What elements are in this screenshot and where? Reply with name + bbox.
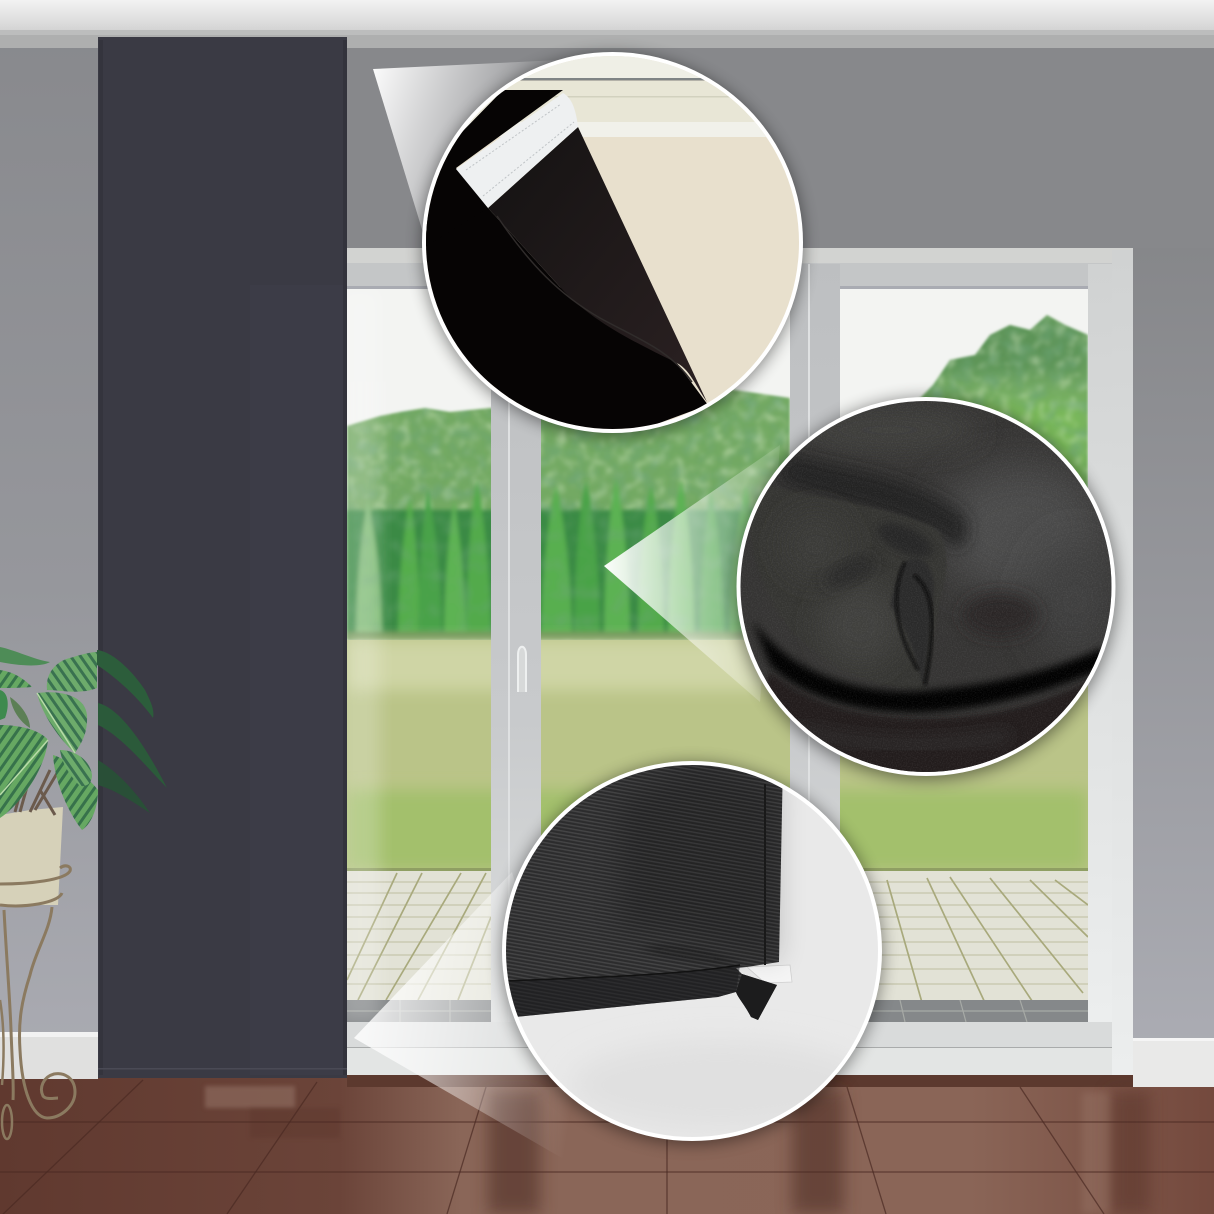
plant stand [0, 866, 75, 1139]
side seam [764, 784, 766, 965]
lawn [347, 640, 1088, 872]
window frame [347, 248, 1133, 1075]
plant pot [0, 807, 63, 905]
window handle [518, 647, 526, 692]
distant trees [347, 315, 1088, 645]
garden view through the glass [340, 289, 1088, 1022]
callout wedge: fabric detail [604, 445, 780, 702]
black fabric front [415, 168, 708, 445]
curtain panel [97, 37, 347, 1078]
detail circle: draped fabric [735, 395, 1120, 780]
detail circle: bottom hem [500, 760, 885, 1145]
fabric shading [620, 760, 783, 962]
diagonal shadow behind the fold [775, 455, 968, 548]
hedge [347, 482, 753, 640]
glass reflection [347, 416, 386, 1022]
plant [0, 647, 98, 830]
paving [347, 871, 1088, 1022]
callout wedge: bottom detail [354, 872, 600, 1180]
plant leaves seen through panel [97, 650, 167, 813]
dark blob right of centre [962, 593, 1038, 637]
dark fabric fold [488, 127, 707, 402]
cream window background [420, 50, 810, 440]
baseboards [0, 1032, 1214, 1087]
lower fabric [765, 674, 1086, 772]
deep fold band [752, 620, 1112, 712]
floor tiles [0, 1075, 1214, 1214]
twisted corner [736, 974, 777, 1020]
hem fold [505, 965, 740, 1017]
callout wedge: top detail [373, 60, 560, 262]
woven fabric [500, 760, 783, 1020]
white velcro strip [456, 93, 578, 208]
left lobe [749, 485, 946, 576]
ceiling and cornice [0, 0, 1214, 48]
detail circle: top velcro strip [415, 50, 810, 445]
white strip [747, 965, 792, 983]
swirl centre [890, 560, 934, 678]
light highlights [935, 465, 1105, 595]
